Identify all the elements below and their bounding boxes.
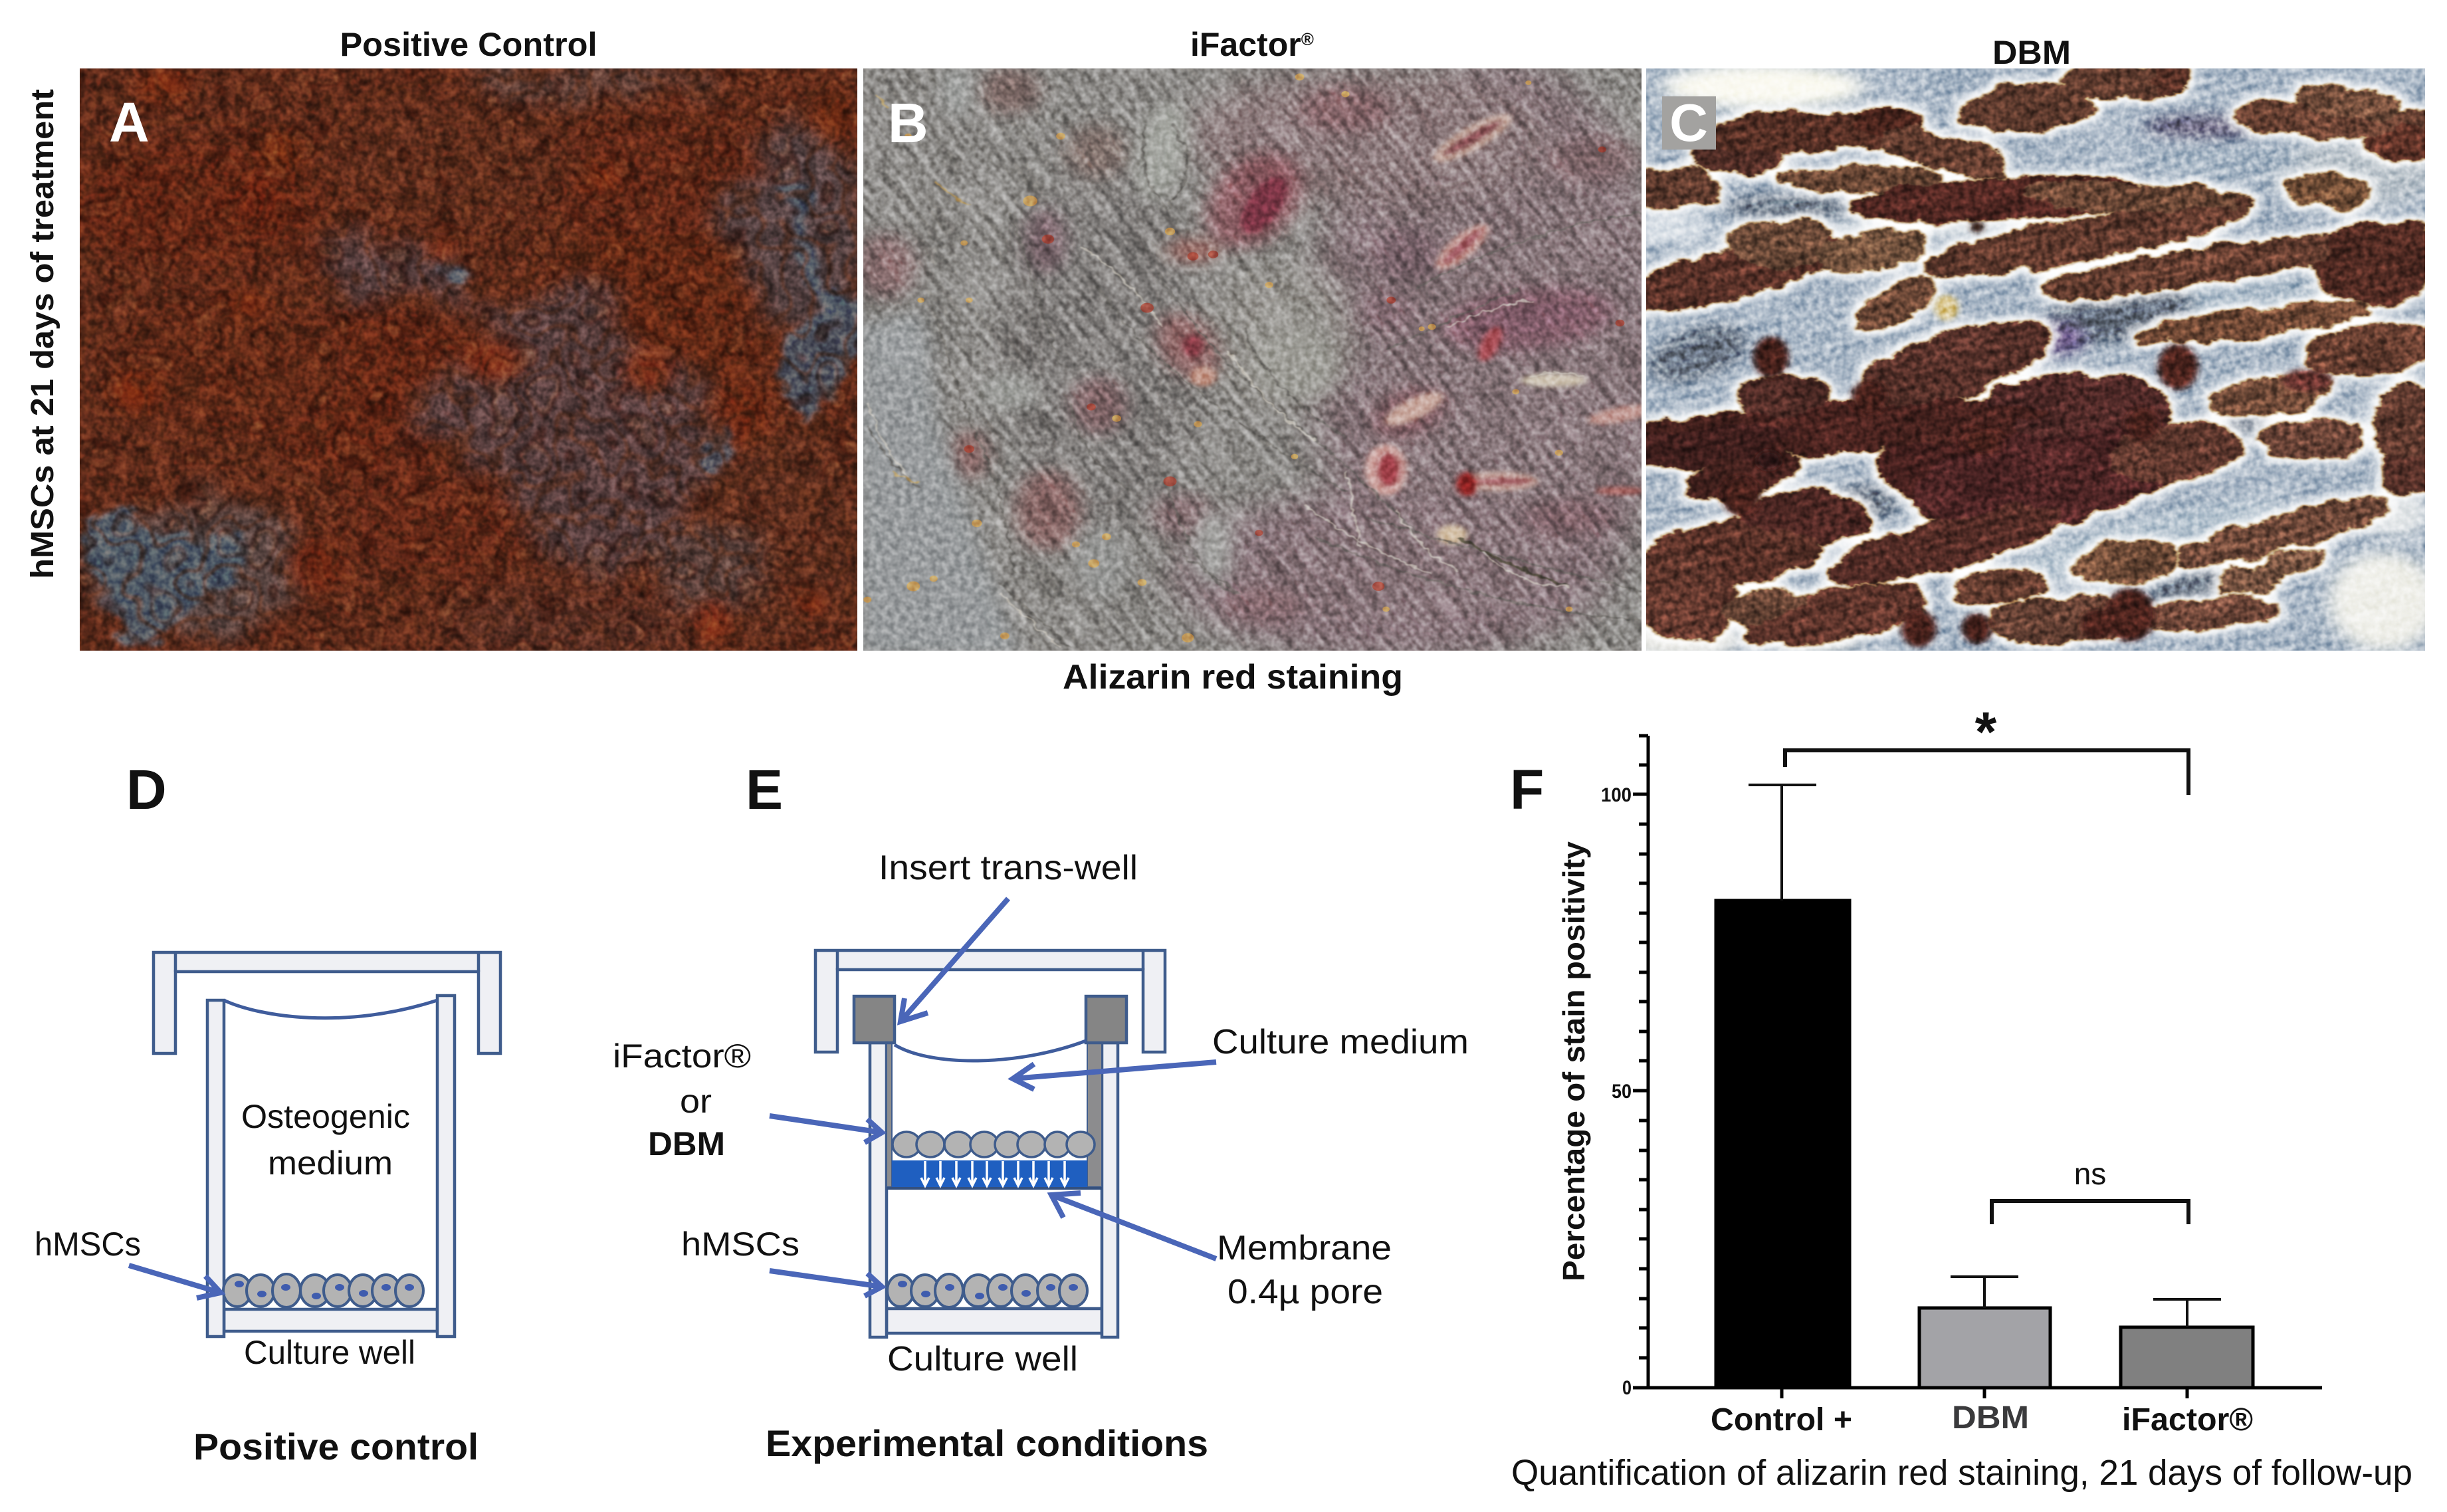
heading: iFactor: iFactor <box>1190 26 1301 63</box>
label: Osteogenic medium <box>241 1098 410 1182</box>
label: Osteogenic medium: Osteogenic <box>241 1098 410 1135</box>
tone correction <box>80 68 857 651</box>
label: Culture well: Culture well <box>887 1340 1078 1378</box>
cell outline texture <box>80 68 857 651</box>
upper cells <box>893 1132 1095 1157</box>
arrow: hMSCs <box>770 1271 882 1296</box>
label: Membrane 0.4µ pore: Membrane <box>1217 1229 1392 1267</box>
outer well <box>870 1043 1118 1337</box>
label: Culture medium: Culture medium <box>1212 1023 1469 1061</box>
label: hMSCs: hMSCs <box>35 1226 141 1263</box>
membrane base line <box>887 1187 1102 1190</box>
panel letter D: D <box>126 758 167 821</box>
row axis label: hMSCs at 21 days of treatment <box>25 89 60 579</box>
heading: DBM: DBM <box>1992 34 2071 71</box>
ns bracket <box>1992 1201 2188 1224</box>
panel E: experimental conditions diagram <box>613 849 1469 1464</box>
heading: Positive Control: Positive Control <box>340 26 597 63</box>
label: iFactor or DBM: iFactor® <box>613 1037 751 1075</box>
ns label: ns <box>2074 1156 2106 1191</box>
x labels <box>1711 1400 2253 1438</box>
lid <box>815 950 1165 1052</box>
axes and ticks <box>1633 736 2322 1398</box>
panel letter F: F <box>1510 758 1544 821</box>
label: Membrane 0.4µ pore <box>1217 1229 1392 1311</box>
caption: Experimental conditions: Experimental conditions <box>766 1422 1208 1464</box>
fibre streaks <box>388 0 2201 1336</box>
arrow: culture medium <box>1013 1062 1216 1089</box>
panel D: positive control diagram <box>35 952 500 1467</box>
x labels: iFactor® <box>2122 1402 2253 1438</box>
panel letter B: B <box>888 92 928 154</box>
y tick labels: 0 <box>1622 1377 1632 1399</box>
cell layer <box>223 1274 423 1307</box>
lid <box>154 952 500 1053</box>
label: iFactor or DBM <box>613 1037 751 1162</box>
label: iFactor or DBM: or <box>680 1083 712 1120</box>
panel caption: Alizarin red staining: Alizarin red staining <box>1063 658 1403 697</box>
label: Insert trans-well: Insert trans-well <box>879 849 1138 887</box>
error bars <box>1749 785 2221 1327</box>
membrane <box>892 1160 1087 1187</box>
label: Culture well: Culture well <box>244 1334 415 1371</box>
y tick labels <box>1601 784 1632 1399</box>
caption: Positive control: Positive control <box>193 1426 479 1467</box>
arrow: membrane <box>1051 1193 1216 1259</box>
lower cells <box>887 1274 1087 1307</box>
x labels: Control + <box>1711 1402 1852 1438</box>
panel A: positive control micrograph <box>61 60 875 663</box>
culture well <box>207 996 455 1337</box>
panel C: DBM micrograph <box>1263 0 2447 1133</box>
y tick labels: 50 <box>1612 1081 1632 1103</box>
medium surface <box>895 1041 1086 1061</box>
panel letter A: A <box>109 91 150 154</box>
y tick labels: 100 <box>1601 784 1632 806</box>
bars <box>1716 901 2253 1388</box>
strand streak texture <box>1263 0 2447 1133</box>
x labels: DBM <box>1952 1400 2029 1436</box>
significance star: * <box>1975 701 1997 763</box>
arrow: hMSCs <box>129 1265 221 1298</box>
medium surface <box>224 1000 437 1018</box>
label: iFactor or DBM: DBM <box>648 1125 725 1162</box>
significance bracket <box>1785 750 2188 795</box>
panel B: iFactor micrograph <box>388 0 2201 1336</box>
label: Osteogenic medium: medium <box>268 1144 393 1182</box>
arrow: insert trans-well <box>901 899 1008 1022</box>
label: Membrane 0.4µ pore: 0.4µ pore <box>1227 1273 1383 1311</box>
insert walls <box>887 1043 1102 1187</box>
panel F: bar chart <box>1511 701 2412 1493</box>
panel letter E: E <box>746 758 783 821</box>
label: hMSCs: hMSCs <box>681 1226 799 1263</box>
arrow: iFactor or DBM <box>770 1116 882 1142</box>
chart caption: Quantification of alizarin red staining, 21 days of follow-up <box>1511 1453 2412 1493</box>
y axis title: Percentage of stain positivity <box>1556 841 1591 1281</box>
panel letter C: C <box>1669 93 1708 152</box>
diffusion arrows <box>921 1161 1069 1186</box>
smooth substrate areas <box>857 64 1338 655</box>
heading: iFactor: ® <box>1301 29 1314 49</box>
insert caps <box>854 996 1126 1043</box>
lid inner dividers <box>175 952 479 972</box>
